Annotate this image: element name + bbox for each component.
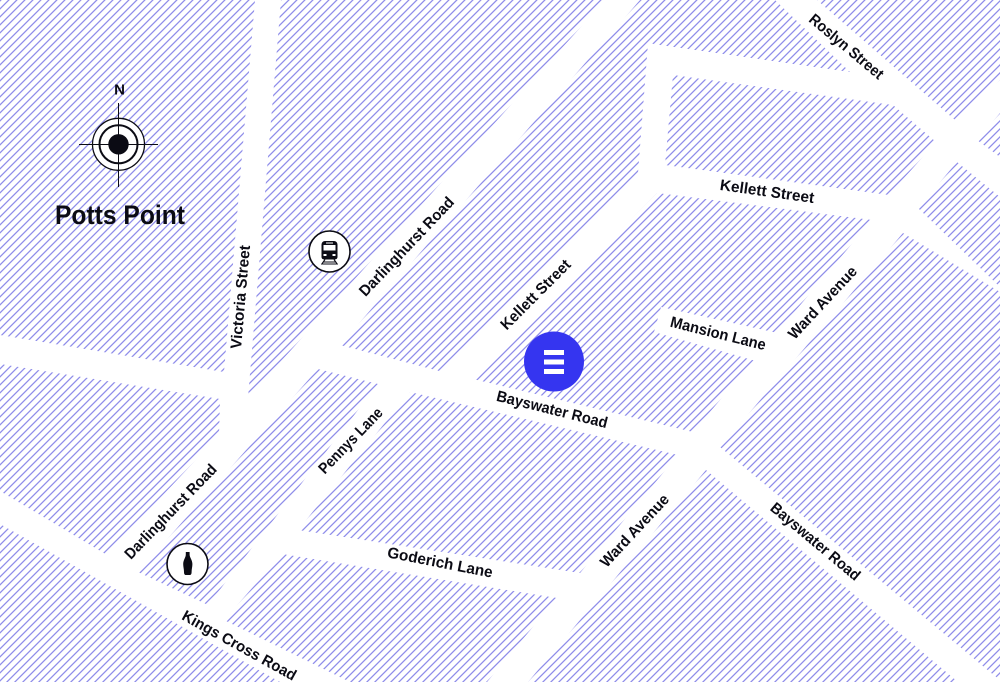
label: Goderich Lane: Goderich Lane [386,544,494,582]
block: Bayswater to Goderich [298,392,678,573]
label: Ward Avenue north: Ward Avenue [785,263,861,343]
icon: bottle shop [167,544,208,584]
street labels [121,11,887,682]
block: east [918,162,1000,287]
title: Potts Point [55,200,185,230]
compass [79,82,158,187]
block: south of Goderich [224,554,557,682]
label: Victoria Street: Victoria Street [228,244,254,350]
label: Kellett Street: Kellett Street [719,177,815,207]
block: Darlinghurst to Pennys Lane [138,369,378,605]
label: Mansion Lane: Mansion Lane [668,314,768,354]
block: west [0,364,220,555]
label: Bayswater Road east: Bayswater Road [767,499,863,585]
label: Darlinghurst Road north: Darlinghurst Road [356,194,458,300]
block: north-west [0,0,255,372]
block: far east small [977,113,1000,157]
road: Mansion Lane [654,307,800,365]
icon: train station [309,231,350,272]
block: north-east [817,0,1000,120]
block: Darlinghurst to Kellett [340,0,850,372]
label: Bayswater Road: Bayswater Road [495,388,609,432]
block: south of Bayswater Road [528,470,958,682]
block: south-west [0,524,280,682]
compass rings [79,103,158,187]
icon: venue marker [524,332,584,392]
block: Victoria to Darlinghurst [248,0,605,398]
block: east of Ward Avenue [720,233,1000,682]
label: Kellett Street diagonal: Kellett Street [497,256,575,334]
label: Ward Avenue south: Ward Avenue [597,491,673,571]
compass north letter: N [114,82,125,98]
block: Mansion Lane [473,193,872,432]
label: Pennys Lane: Pennys Lane [315,404,387,477]
block: Kellett north [665,75,936,195]
label: Roslyn Street: Roslyn Street [805,11,887,83]
label: Darlinghurst Road south: Darlinghurst Road [121,461,221,563]
